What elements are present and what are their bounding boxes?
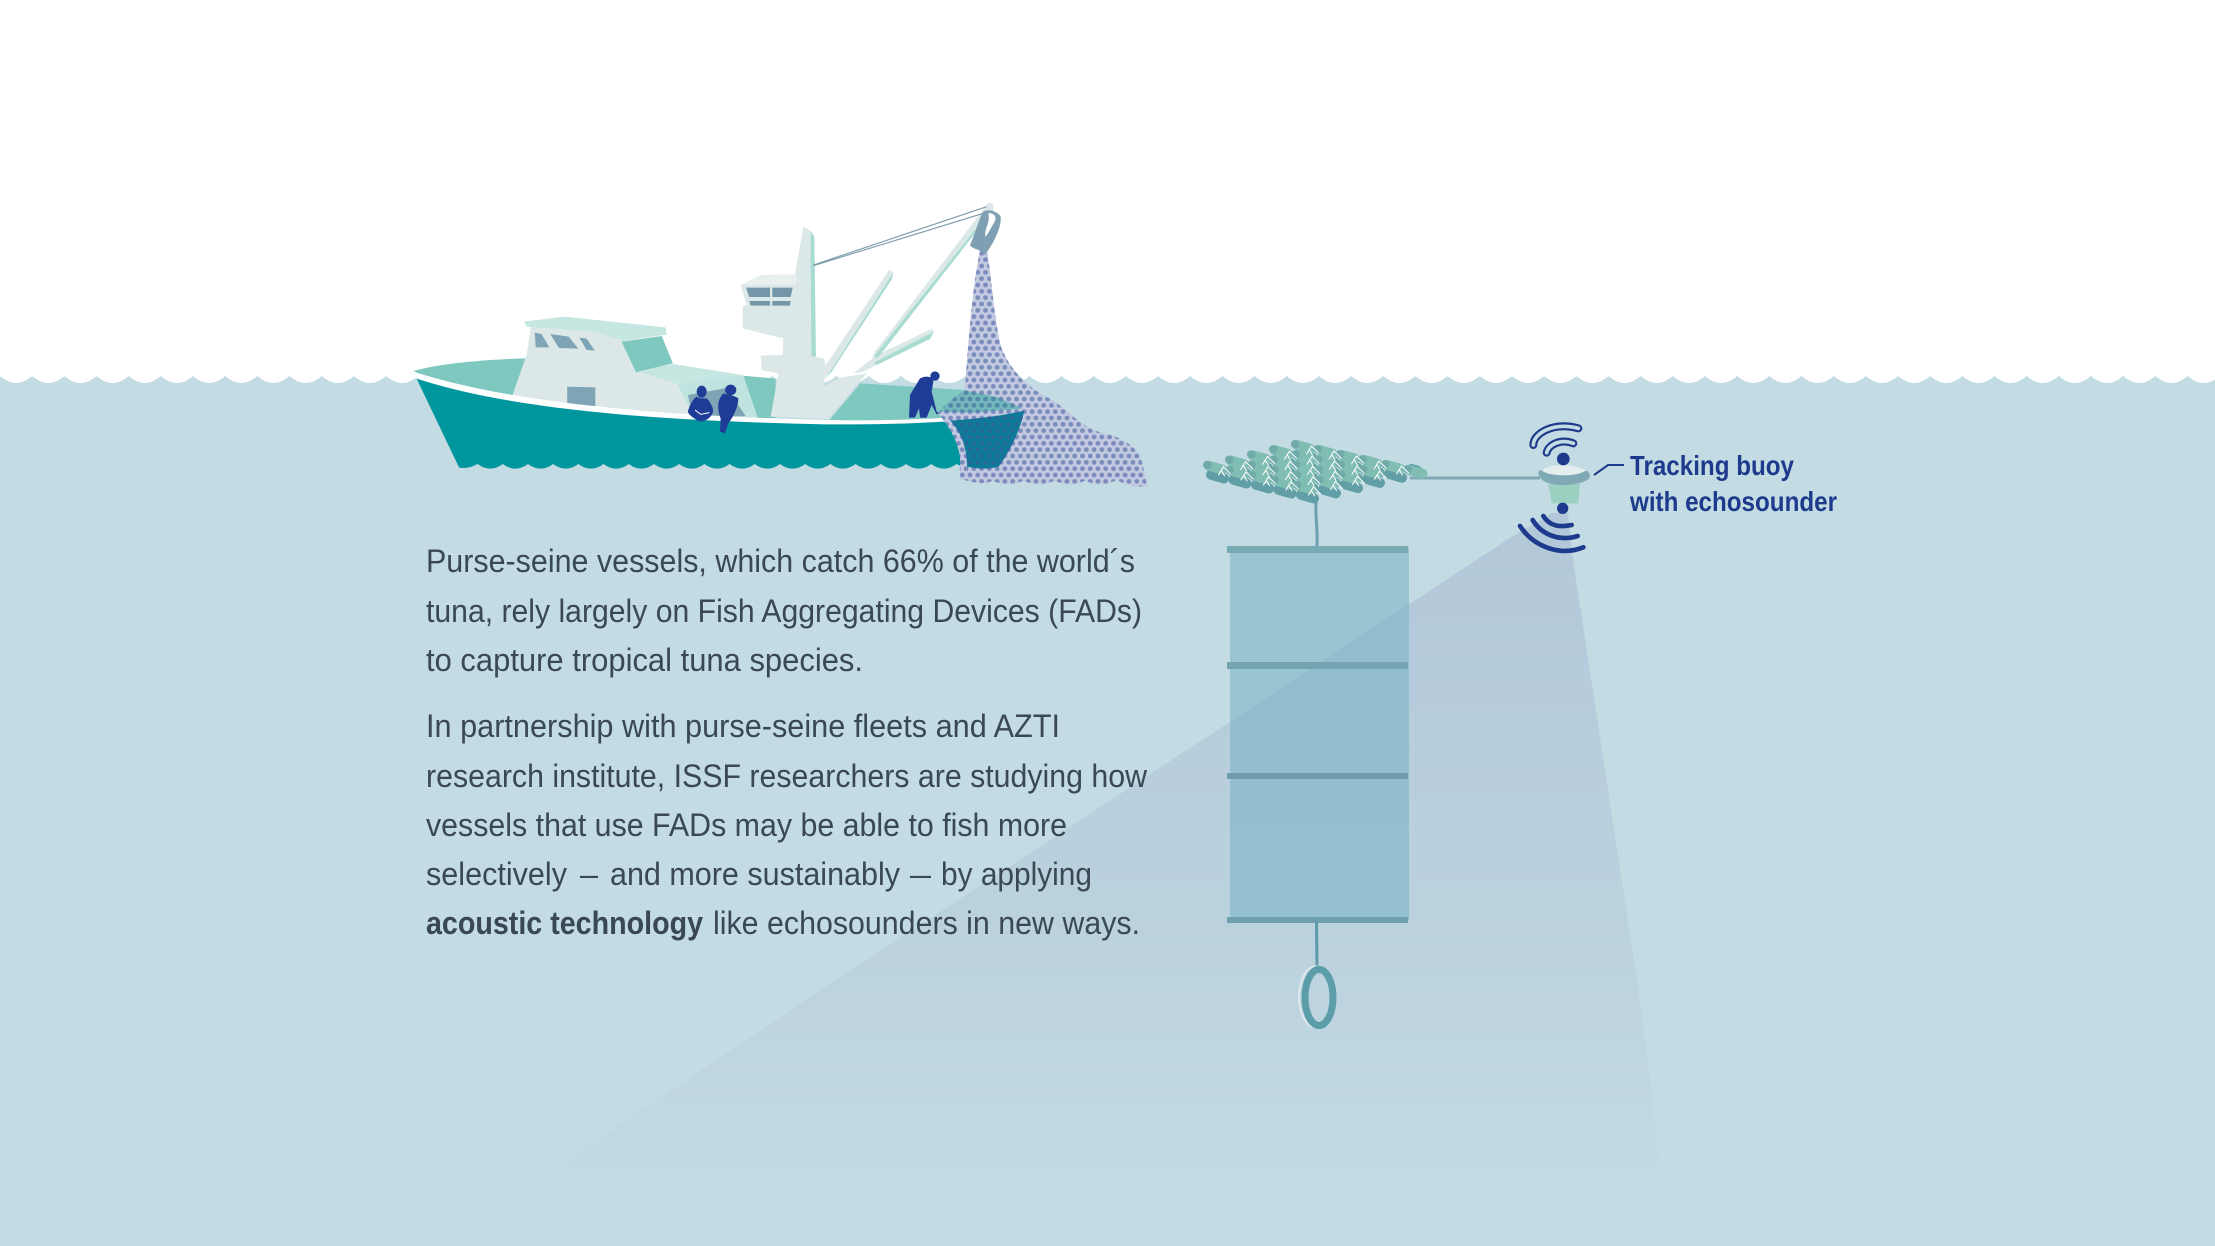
upper signal waves bbox=[1533, 426, 1578, 453]
paragraph two: In partnership with purse-seine fleets and AZTI bbox=[426, 708, 1060, 744]
wheelhouse roof bbox=[741, 274, 797, 285]
short boom bbox=[853, 329, 934, 373]
pulley block bbox=[970, 210, 1001, 255]
hull bbox=[416, 377, 1024, 469]
mast and wheelhouse bbox=[741, 227, 867, 419]
paragraph two: — bbox=[580, 856, 598, 892]
mid deck bbox=[739, 375, 776, 418]
paragraph one: to capture tropical tuna species. bbox=[426, 642, 863, 678]
paragraph two: research institute, ISSF researchers are studying how bbox=[426, 758, 1148, 794]
seated crew arms bbox=[695, 410, 709, 414]
fish aggregating device bbox=[1207, 444, 1540, 1028]
rope from raft to net bbox=[1316, 498, 1317, 550]
windshield bbox=[622, 336, 673, 372]
lower signal waves bbox=[1520, 516, 1583, 551]
mast, wheelhouse and booms bbox=[741, 202, 993, 419]
paragraph two: by applying bbox=[941, 856, 1092, 892]
paragraph one: tuna, rely largely on Fish Aggregating Devices (FADs) bbox=[426, 593, 1142, 629]
small boom highlight bbox=[825, 272, 893, 379]
net over hull bbox=[950, 411, 1024, 469]
tracking buoy with echosounder bbox=[1520, 426, 1837, 551]
main boom highlight bbox=[875, 210, 993, 358]
paragraph two: acoustic technology bbox=[426, 905, 703, 941]
wheelhouse windows bbox=[746, 288, 793, 306]
white gunwale stripe bbox=[414, 372, 1025, 424]
submerged net panel bbox=[1230, 548, 1409, 920]
rope from raft to buoy bbox=[1410, 476, 1540, 480]
net over deck bbox=[936, 390, 1023, 413]
upper signal dot bbox=[1557, 453, 1570, 465]
rear deck bbox=[414, 358, 527, 398]
crew member leaning bbox=[718, 385, 738, 433]
paragraph two: like echosounders in new ways. bbox=[713, 905, 1140, 941]
leader line bbox=[1594, 465, 1624, 475]
lower signal dot bbox=[1557, 503, 1568, 514]
hatch behind crew bbox=[688, 388, 746, 417]
main boom bbox=[828, 202, 993, 419]
paragraph two: and more sustainably bbox=[610, 856, 900, 892]
net hauling gear bbox=[936, 247, 1147, 487]
purse-seine net bbox=[938, 247, 1147, 487]
small boom bbox=[825, 270, 893, 378]
buoy artwork bbox=[1520, 426, 1590, 551]
buoy dome bbox=[1542, 465, 1585, 476]
short boom highlight bbox=[874, 332, 934, 365]
rigging cables bbox=[813, 207, 987, 266]
ring weight bbox=[1299, 966, 1333, 1028]
paragraph two bbox=[426, 708, 1148, 941]
crew member hauling net bbox=[909, 371, 940, 418]
paragraph two: — bbox=[910, 856, 931, 892]
hull, decks and cabin bbox=[414, 317, 1025, 469]
paragraph one bbox=[426, 543, 1142, 678]
buoy label bbox=[1629, 450, 1837, 517]
paragraph two: selectively bbox=[426, 856, 567, 892]
cabin roof bbox=[524, 317, 667, 341]
buoy collar bbox=[1538, 470, 1590, 485]
sea with scalloped waterline bbox=[0, 376, 2215, 1246]
paragraph two: vessels that use FADs may be able to fish more bbox=[426, 807, 1067, 843]
purse-seine fishing vessel bbox=[414, 202, 1147, 487]
cabin windows bbox=[535, 333, 595, 407]
crew member seated bbox=[688, 386, 713, 421]
floating raft of bamboo floats bbox=[1207, 444, 1422, 498]
rope to ring weight bbox=[1315, 919, 1318, 968]
cabin bbox=[511, 327, 758, 418]
net float lines bbox=[1227, 546, 1408, 923]
front deck bbox=[829, 383, 1025, 423]
paragraph one: Purse-seine vessels, which catch 66% of the world´s bbox=[426, 543, 1135, 579]
buoy label: Tracking buoy bbox=[1630, 450, 1794, 481]
buoy label: with echosounder bbox=[1629, 486, 1837, 517]
mast highlight bbox=[811, 231, 816, 357]
echosounder acoustic beam bbox=[470, 513, 1664, 1225]
buoy body bbox=[1548, 484, 1580, 503]
foredeck housing front bbox=[678, 375, 758, 418]
foredeck housing top bbox=[638, 364, 743, 384]
crew members at the rail bbox=[688, 385, 738, 433]
text block bbox=[426, 543, 1148, 941]
